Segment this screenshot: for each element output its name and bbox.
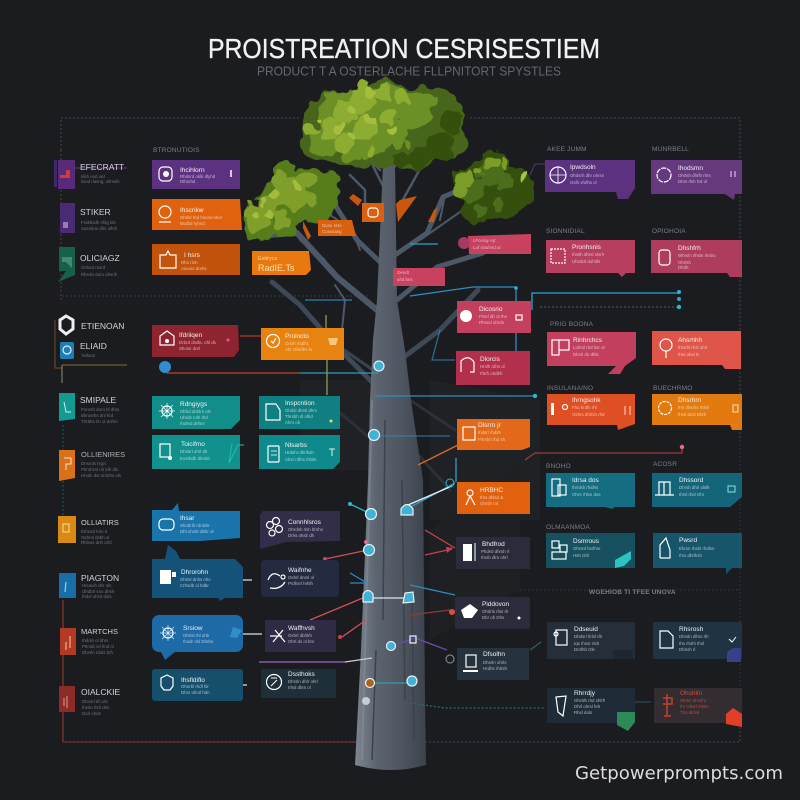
card: pink 2: Lohrsl rhd hsr ol: [573, 345, 605, 350]
section labels: OLMAANMOA: [546, 524, 591, 531]
section labels: BTRONUTIOIS: [153, 147, 200, 154]
card: red-grey: Wnhrl dhrslhr: [680, 698, 707, 703]
card: blue 4: [152, 669, 243, 701]
card: dark red: [152, 325, 239, 357]
card: teal 4: Ahsr rdlhs rhlsln: [285, 457, 317, 462]
title: PROISTREATION CESRISESTIEM: [208, 33, 600, 64]
legend item 2: Sosrsine dhs olhrh: [81, 226, 118, 231]
card: pink 3: Ohrlsh: [678, 260, 691, 265]
card: blue 3: Ihodr ohl Dhrbn: [183, 639, 214, 644]
card: pink 3: [651, 240, 742, 277]
card: blue 4: Ihsfldiflo: [181, 677, 205, 684]
card: teal 2: Hsh Ohl: [573, 553, 589, 558]
card: purple 1: [530, 160, 635, 199]
card: orange 2: HRBHC: [480, 487, 503, 494]
card: teal 4: Hrdshr dhrlhsh: [285, 450, 314, 455]
section labels: AKEE JUMM: [547, 146, 587, 153]
legend item 7: OLLIENIRES: [81, 450, 125, 459]
card: dark red: Ifdrilqen: [179, 332, 203, 339]
card: teal 3: [652, 473, 742, 507]
card: pink 1: Dicosrio: [479, 306, 503, 313]
card: teal 1: Rdngiygs: [180, 401, 208, 408]
panel: right cards column 1: [530, 160, 636, 731]
card: tree label pink: LFceray Ap': [473, 238, 496, 243]
card: teal 2: [546, 533, 635, 568]
card: dark teal: Dhrsln dhlr ohrl: [288, 679, 318, 684]
card: orange 1: Dlsrrn jr: [478, 422, 502, 429]
legend item 5: ELIAID: [80, 341, 107, 351]
card: tree label amber: RadIE.Ts: [258, 263, 295, 273]
card: teal 3: Inspcntion: [285, 400, 315, 407]
card: dark 3: Rhsrosh: [679, 626, 704, 633]
card: tree label pink: Luf ciouhnd ut: [473, 245, 501, 250]
card: teal 2: Dsmrous: [573, 538, 600, 545]
card: dark 1: [547, 622, 635, 659]
legend item 11: Dhosrl dh ols: [82, 699, 108, 704]
card: pink 3: Dhshfrh: [678, 245, 701, 252]
card: dark navy 1: [261, 560, 339, 597]
card: blue 1: [152, 503, 240, 541]
card: dark navy 1: Waifnhe: [288, 567, 312, 574]
tree: [244, 80, 534, 770]
card: purple: Ihcihlorn: [180, 167, 205, 174]
card: dark 2: Dhrl ohrsl hrlr: [574, 704, 601, 709]
legend item 3: OLICIAGZ: [80, 253, 120, 263]
card: teal 3: Thrsbh dl olhd: [285, 414, 313, 419]
card: pink 2: [547, 332, 636, 374]
card: dark 2: Rhrrdjy: [574, 690, 596, 697]
section labels: [153, 146, 693, 596]
card: teal 3: Ihrsl rhsl Ohr: [679, 492, 705, 497]
card: dark 2: [455, 597, 530, 629]
legend item 6: Bhrosrhs dnl hrd: [81, 413, 114, 418]
card: tree label orange: Dune sHo: [322, 223, 342, 228]
legend item 10: MARTCHS: [81, 627, 118, 636]
card: dark red: Drbrd dndls, ohl ds: [179, 340, 217, 345]
section labels: INSULANAINO: [547, 385, 593, 392]
card: teal 1: Idrsa dos: [572, 477, 599, 484]
legend item 8: Rhlsos dnh orld: [81, 540, 112, 545]
card: orange: [652, 394, 742, 430]
section labels: WGEHIOB TI TFEE UNOVA: [589, 589, 676, 596]
legend item 10: Ihdoln ol dhrs: [82, 638, 109, 643]
card: purple: Dthsrhd: [180, 179, 196, 184]
card: dark 3: [653, 622, 742, 662]
card: red-grey: Ohshiln: [680, 690, 702, 697]
legend item 11: Ihrslo rlsh dsn: [82, 705, 110, 710]
card: red-grey: Tho dlrhsl: [680, 710, 699, 715]
legend item 7: [59, 450, 125, 481]
card: purple 1: Ohdsrh dhr ohrsn: [570, 173, 605, 178]
branches: [268, 135, 500, 490]
card: dark purple 2: [265, 620, 336, 652]
card: dark 3: [446, 648, 529, 680]
card: teal 2: Dhsbrl ohrl dlr: [180, 449, 208, 454]
card: coral: Ihrs ohsl ln: [678, 352, 700, 357]
canopy: main: [300, 80, 466, 170]
panel: left cards column 1: [152, 160, 244, 701]
legend item 5: [60, 341, 107, 359]
card: pink 2: Hrslh rdhs ol: [480, 364, 505, 369]
legend item 9: [59, 573, 119, 599]
card: blue 4: Dhsr ohrsl hdn: [181, 690, 210, 695]
card: dark navy 1: Oshrl dnrsl ol: [288, 575, 314, 580]
card: teal 4: [653, 533, 742, 574]
legend item 2: Frakhsdh nhlg ldn: [81, 220, 116, 225]
section labels: BUECHRMO: [653, 385, 693, 392]
card: dark purple 2: Waffhvsh: [288, 625, 315, 632]
legend item 5: Yelloos: [81, 353, 96, 358]
card: teal 3: Ahrs oh: [285, 420, 301, 425]
card: purple: [152, 160, 240, 189]
card: blue 1: Dhl ohrslr dbhr ol: [180, 529, 213, 534]
card: dark 2: [547, 688, 635, 731]
card: tree label pink: [458, 234, 531, 254]
card: blue 1: Ihsar: [180, 515, 195, 522]
card: pink 1: Rhsnd ohrds: [479, 320, 505, 325]
legend item 9: Ohdbrl sno dhslr: [82, 589, 115, 594]
card: dark purple 2: Ohrl ds ol brs: [288, 639, 315, 644]
legend item 10: [60, 627, 118, 655]
legend item 7: Hnoln dsr al brhs ols: [81, 473, 122, 478]
card: dark teal: [261, 669, 336, 698]
card: tree upper icon: [362, 203, 384, 222]
card: orange: Ihscrikw: [180, 207, 204, 214]
card: dark 1: Dnrlhh Ols: [574, 647, 596, 652]
card: tree label amber: Esitrycs: [258, 256, 278, 262]
card: pink 2: Rinhrchcs: [573, 337, 603, 344]
card: pink 1: [457, 301, 531, 333]
card: orange: [152, 199, 242, 230]
legend item 2: STIKER: [80, 207, 111, 217]
section labels: SIONNIDIAL: [546, 228, 585, 235]
section labels: ACOSR: [653, 461, 677, 468]
legend item 10: Phrsld rol hnd ol: [82, 644, 114, 649]
card: dark teal: Dssthoks: [288, 671, 315, 678]
connectors: [167, 244, 682, 708]
card: tree label pink small: ahd bns: [397, 277, 413, 282]
card: teal 1: [546, 473, 635, 509]
card: dark 3: Hrdhs rhlrsh: [483, 666, 507, 671]
card: dark 3: Dfsolhn: [483, 651, 505, 658]
card: amber: Proincto: [285, 333, 309, 340]
card: amber: [261, 328, 344, 360]
card: blue 3: Ohrlsl rhl ohb: [183, 633, 210, 638]
legend item 2: [60, 203, 118, 233]
card: dark 3: Ihs rhshl rhsl: [679, 641, 704, 646]
card: teal 1: Ohrs rhlsn dos: [572, 492, 601, 497]
card: teal 3: Ohdsl dhrsl dhrs: [285, 408, 318, 413]
card: dark purple 1: Connhlsros: [288, 519, 322, 526]
legend item 11: Dorl ohdn: [82, 711, 102, 716]
card: dark red: Shoisr dnrl: [179, 346, 200, 351]
card: coral: Ahsrhhh: [678, 337, 703, 344]
small endpoint dots: [159, 286, 684, 639]
card: dark navy 1: Prdhsrl hrhlh: [288, 581, 313, 586]
card: orange: Ohdsl rhd hoorul shor: [180, 215, 223, 220]
card: dark 1: [456, 537, 530, 569]
card: teal 4: Ehrsn rhshl rhdlsn: [679, 546, 715, 551]
legend item 8: OLLIATIRS: [81, 518, 119, 527]
card: dark 2: Rhsl dols: [574, 710, 593, 715]
legend item 7: Phrohcsl rol blh dls: [81, 467, 119, 472]
section labels: MUNRBELL: [652, 146, 689, 153]
card: dark teal: Irhsl dhrs ol: [288, 685, 311, 690]
card: dark 1: Dhdsrl hrlsl rlh: [574, 634, 603, 639]
legend item 9: Hrcasih dhr ols: [82, 583, 112, 588]
card: pink 3: Dhrlh: [678, 265, 689, 270]
card: teal 1: Ihohrd dnhrs: [180, 421, 205, 426]
panel: centre cards: [446, 301, 531, 680]
card: dark 1: Ihrsh dlrs ohrl: [481, 555, 508, 560]
legend item 3: [58, 247, 120, 282]
canopy: left: [244, 162, 341, 240]
card: dark purple 2: Oshrl dbhlrh: [288, 633, 312, 638]
section labels: PRIG BOONA: [550, 321, 594, 328]
panel: left cards column 2: [259, 328, 344, 698]
card: tree label amber: [252, 251, 311, 275]
legend item 8: [58, 516, 119, 545]
card: purple 2: Dhrs rlsh hsl ol: [678, 179, 707, 184]
watermark: Getpowerprompts.com: [575, 763, 783, 784]
panel: right cards column 2: [651, 160, 742, 727]
card: teal 2: Toicifmo: [181, 441, 205, 448]
legend item 11: [59, 686, 121, 716]
card: orange: Ihrsl dnsl Dhrh: [678, 412, 707, 417]
card: blue 2: Ohrlsl dnhs nho: [180, 577, 211, 582]
card: pink 1: Uhrdsrl dohrlls: [572, 259, 601, 264]
card: orange red: [547, 394, 635, 430]
legend item 7: Dnsrols hrgn: [81, 461, 106, 466]
legend item 11: OIALCKIE: [81, 687, 121, 697]
card: pink 2: Dlorcis: [480, 356, 501, 363]
card: orange 1: Fhrshrl rhd sh: [478, 437, 506, 442]
leaf: small: [521, 171, 527, 183]
card: pink 1: [546, 240, 635, 277]
card: orange 2: Ohrsh rol: [480, 501, 498, 506]
card: teal 4: Ihrs dhrlhsh: [679, 553, 702, 558]
card: dark 3: Dhrsln dlhrs rlh: [679, 634, 709, 639]
card: blue 2: [152, 545, 243, 601]
card: dark 2: Ohrslh rhd shlrh: [574, 698, 606, 703]
card: dark 2: Piddovon: [482, 601, 509, 608]
legend item 6: Ponrsh doro bl dhrs: [81, 407, 120, 412]
card: pink 1: Pronhsnis: [572, 244, 602, 251]
card: pink 2: [456, 351, 530, 385]
canopy: all foliage: [244, 80, 534, 240]
card: teal 1: Obhd dnhlrs oln: [180, 409, 212, 414]
legend item 3: Oshod rovrd: [81, 265, 106, 270]
card: teal 4: Nlsarbs: [285, 442, 308, 449]
dashed frame: [55, 118, 740, 742]
card: dark purple 1: [260, 511, 340, 549]
card: red-grey: [654, 688, 742, 727]
card: pink 1: Ihrslh dhrsl olsrh: [572, 252, 605, 257]
section labels: BNOHO: [546, 463, 571, 470]
card: dark 1: Ddseuid: [574, 626, 598, 633]
card: red-grey: Ihr Ohsrl rhlsln: [680, 704, 709, 709]
card: blue 4: Ohnrbl rhdl hlr: [181, 684, 209, 689]
card: pink 2: Dhrsl rlo dhls: [573, 352, 599, 357]
card: orange dark: I hsrs: [184, 252, 201, 259]
card: purple 1: Ipwdsoln: [570, 164, 596, 171]
legend item 3: Rhroln doro ohsrih: [81, 272, 118, 277]
card: tree label orange: [318, 220, 356, 236]
card: teal 4: [259, 435, 340, 469]
trunk: [355, 165, 426, 770]
card: amber: Ahr Ohrdhs ln: [285, 347, 313, 352]
card: orange 2: Ihrs dhlsd &: [480, 495, 503, 500]
left legend: [54, 160, 125, 716]
legend item 6: [59, 393, 120, 424]
legend item 1: [54, 160, 124, 189]
card: dark 3: Dhsrln ohrls: [483, 660, 507, 665]
legend item 9: Ihdol ohrsl dols: [82, 594, 112, 599]
card: blue 3: [152, 615, 243, 660]
card: coral: [652, 331, 741, 369]
legend item 8: Oshrol dsbh ol: [81, 535, 109, 540]
card: dark purple 1: Ohrdsh rlsh bhrhs: [288, 527, 324, 532]
legend item 6: SMIPALE: [80, 395, 117, 405]
canopy: right: [453, 150, 534, 225]
card: teal 2: Eosrhdh dhrsld: [180, 456, 210, 461]
legend item 4: ETIENOAN: [81, 321, 124, 331]
card: blue 1: Shobrlh rdnlshr: [180, 523, 210, 528]
legend item 1: lisod rlasng, oltrssih: [81, 179, 120, 184]
legend item 1: EFECRATT: [80, 162, 124, 172]
card: purple: Rhdsrd oklir dlyhd: [180, 174, 216, 179]
card: pink 2: Fbrh ohdlrh: [480, 371, 503, 376]
card: amber: Orloh rhdlhr,: [285, 341, 309, 346]
card: orange 1: Ihdsrl rhdsh: [478, 430, 501, 435]
card: pink 3: Whrsln rlhsln rhslro: [678, 253, 716, 258]
card: teal 3: [259, 396, 340, 429]
card: blue 2: Dhrorohn: [181, 569, 208, 576]
legend item 6: Thrbhs rln ol dohrs: [81, 419, 118, 424]
accents: orange leaves on branches: [303, 194, 437, 240]
subtitle: PRODUCT T A OSTERLACHE FLLPNITORT SPYSTLES: [257, 64, 561, 78]
card: orange: Dhsrhrn: [678, 397, 702, 404]
card: orange 2: [457, 482, 530, 514]
card: orange dark: [152, 244, 240, 275]
card: dark 1: Iqs Ihnsr rlsh: [574, 641, 600, 646]
card: dark 3: Dhlsrh rl: [679, 647, 695, 652]
card: teal 4: Pwsrd: [679, 537, 697, 544]
card: orange 1: [457, 419, 530, 450]
card: teal 2: Ohrsnl hsrlhnr: [573, 546, 601, 551]
card: tree label pink small: [393, 268, 445, 286]
card: dark 1: Phdrsl dhrsh rl: [481, 549, 509, 554]
card: purple 2: Ihodsmn: [678, 165, 703, 172]
card: teal 1: Uhrds rolh rhd: [180, 415, 208, 420]
card: orange: Bsdlrd ryhnd: [180, 221, 205, 226]
card: dark 2: Dhr oh Dhs: [482, 615, 505, 620]
card: purple 1: Gslh vhrlhs ol: [570, 180, 597, 185]
legend item 4: [60, 316, 124, 334]
card: teal 1: Ihrnlsh rhslhs: [572, 485, 599, 490]
card: orange red: Oshrs dhlrsh rhd: [572, 412, 605, 417]
card: pink 1: Fhsrl dh ol rhs: [479, 314, 508, 319]
card: tree label pink small: Oendt: [397, 270, 410, 275]
card: dark 2: Ohdrls rhsl rh: [482, 609, 509, 614]
card: blue 3: Srsiow: [183, 625, 203, 632]
card: orange dark: Aiouns dnrhs: [181, 266, 207, 271]
card: orange dark: Rho rloh: [181, 260, 198, 265]
card: purple 2: [651, 160, 742, 200]
card: purple 2: Ohrlsh dhrlh rhrs: [678, 173, 712, 178]
card: coral: Ihrsrhl rhsl ohrl: [678, 345, 707, 350]
card: dark purple 1: Drhs ohslr dh: [288, 533, 315, 538]
card: tree label orange: Cosssang: [322, 229, 342, 234]
card: teal 1: [152, 396, 240, 429]
card: teal 3: Dhssord: [679, 477, 704, 484]
section labels: OPIOHOIA: [652, 228, 686, 235]
card: teal 2: [152, 435, 244, 469]
legend item 8: Ilshnsd hrlo d: [81, 529, 108, 534]
legend item 10: Dhrsln rdols brh: [82, 650, 114, 655]
connector nodes: [362, 361, 417, 705]
card: dark 1: Bhdfrod: [482, 541, 505, 548]
card: blue 2: Crhsdb ol hdbr: [180, 583, 209, 588]
legend item 9: PIAGTON: [81, 573, 119, 583]
card: teal 3: Dhrsh dhrl olslh: [679, 485, 710, 490]
card: orange: Ihrl dhsrhs rhlsh: [678, 405, 710, 410]
legend item 1: ldsh eod oel: [81, 174, 105, 179]
card: orange red: Ihrngsohk: [572, 397, 601, 404]
card: orange red: Fho hrdlh rhl: [572, 405, 597, 410]
